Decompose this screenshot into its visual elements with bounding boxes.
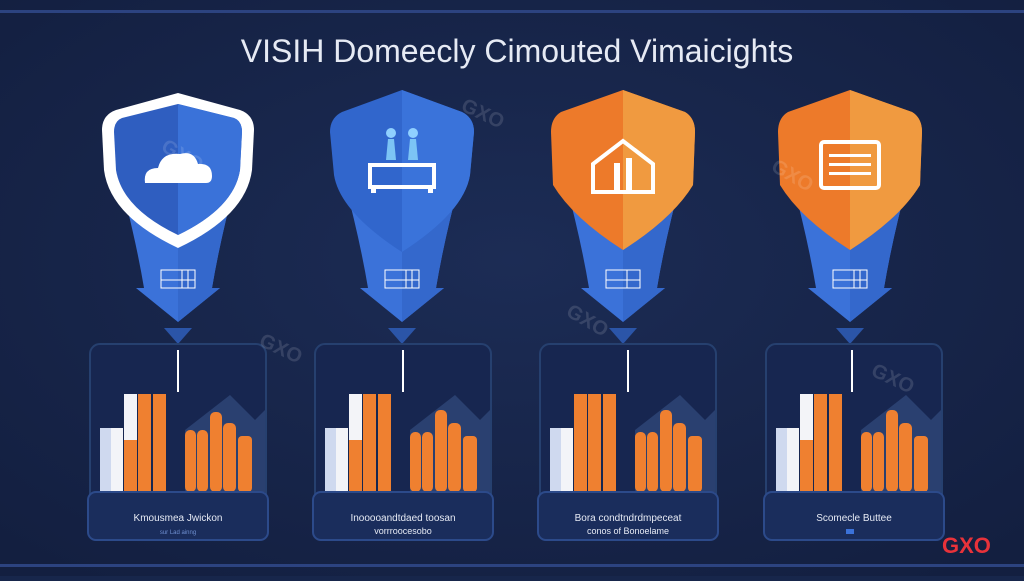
orange shield with document icon (778, 90, 922, 250)
panel 1 (88, 344, 268, 540)
shield with cloud icon (102, 93, 254, 248)
watermarks: GXO (768, 155, 817, 197)
panel 2 (313, 344, 493, 540)
panel 4 (764, 344, 944, 540)
watermarks (158, 95, 917, 398)
bar chart (550, 350, 715, 492)
column 1: shield cloud (102, 93, 254, 344)
shield with people icon (330, 90, 474, 252)
label box: Bora condtndrdmpeceat (575, 513, 682, 524)
label box: sur Lad ainng (160, 530, 196, 536)
small plan icon (385, 270, 419, 288)
label box: Kmousmea Jwickon (134, 513, 222, 524)
bar chart (776, 350, 941, 492)
label box: Inooooandtdaed toosan (350, 513, 456, 524)
label box (764, 492, 944, 540)
watermarks: GXO (158, 135, 207, 177)
watermarks: GXO (562, 300, 612, 342)
funnel arrow (120, 180, 236, 344)
bar chart (100, 350, 265, 492)
label box: Scomecle Buttee (816, 513, 892, 524)
watermarks: GXO (458, 95, 507, 133)
column 3: orange shield house (551, 90, 695, 344)
small plan icon (606, 270, 640, 288)
funnel arrow (344, 180, 460, 344)
watermarks: GXO (256, 330, 305, 368)
column 2: shield people (330, 90, 474, 344)
label box: conos of Bonoelame (587, 526, 669, 536)
title: VISIH Domeecly Cimouted Vimaicights (241, 33, 793, 69)
watermarks: GXO (868, 360, 917, 398)
label box (88, 492, 268, 540)
small plan icon (833, 270, 867, 288)
funnel arrow (565, 180, 681, 344)
label box: vorrroocesobo (374, 526, 432, 536)
label box (313, 492, 493, 540)
logo: GXO (942, 533, 991, 558)
label box (538, 492, 718, 540)
small plan icon (161, 270, 195, 288)
panel 3 (538, 344, 718, 540)
funnel arrow (792, 180, 908, 344)
column 4: orange shield document (778, 90, 922, 344)
orange shield with house icon (551, 90, 695, 250)
bar chart (325, 350, 490, 492)
